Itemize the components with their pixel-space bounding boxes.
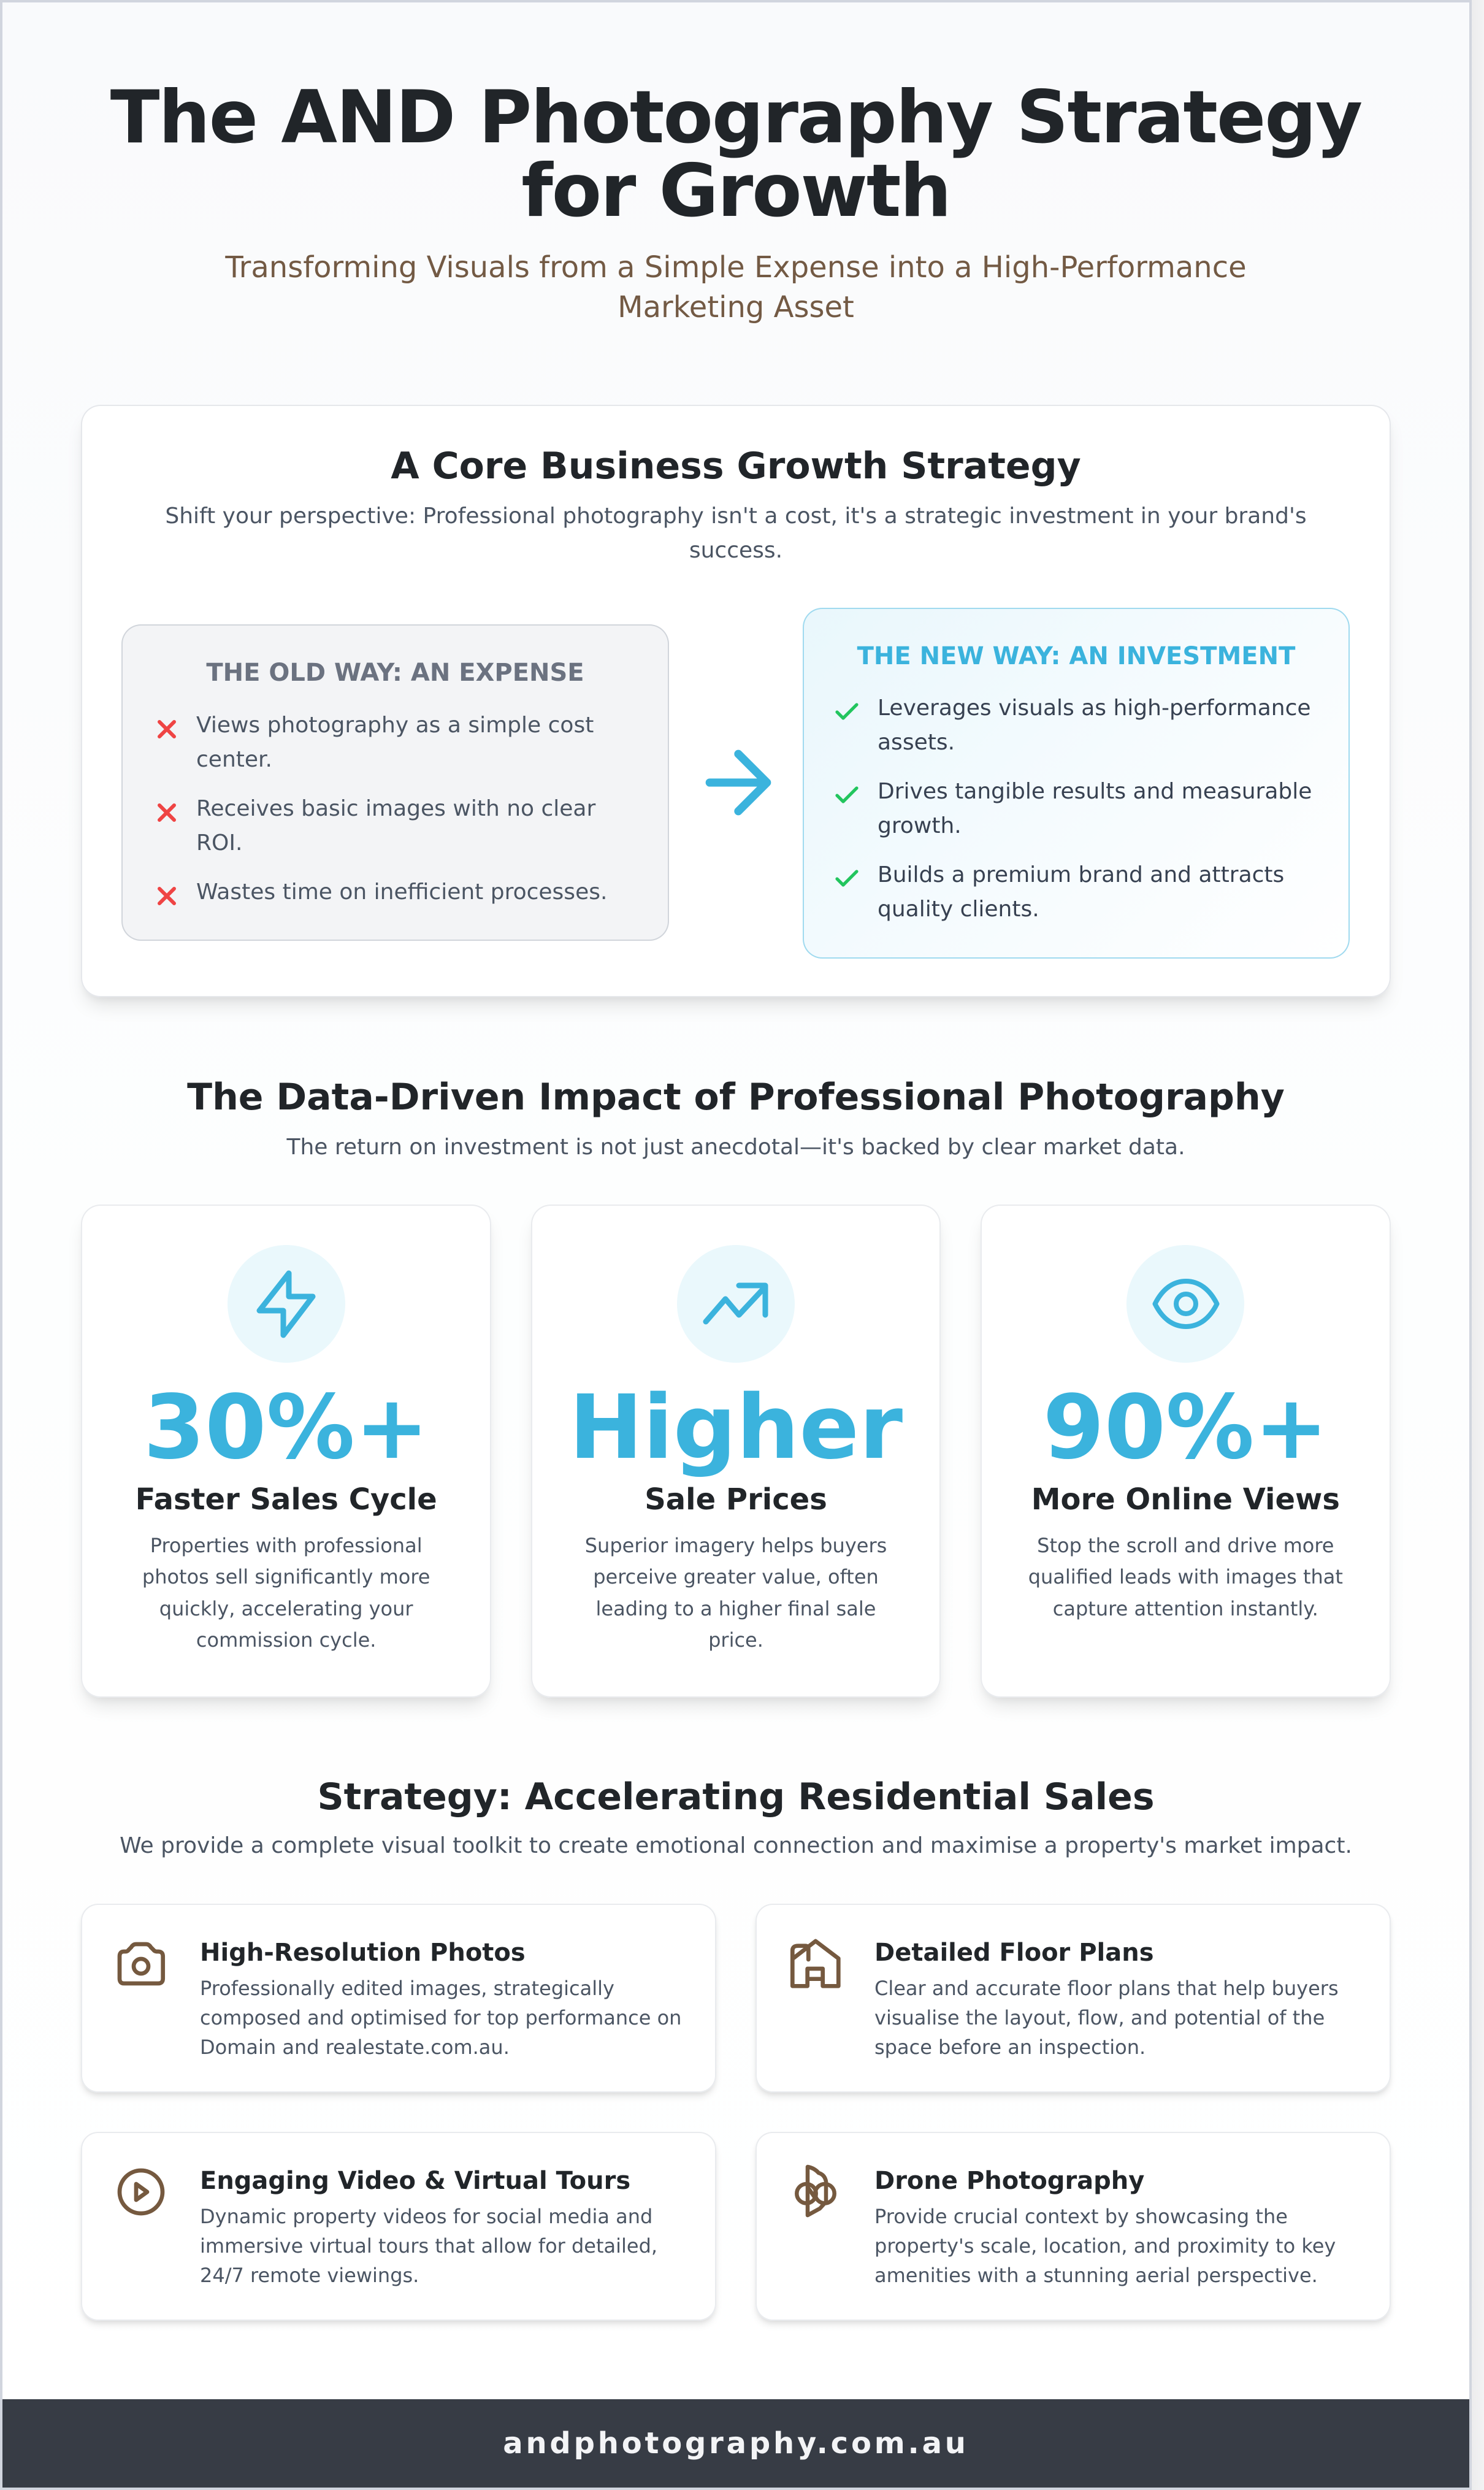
panel: stat higher sale prices xyxy=(531,1205,941,1698)
service description: Dynamic property videos for social media and xyxy=(200,2204,652,2228)
service description: composed and optimised for top performance on xyxy=(200,2005,681,2029)
stat description: qualified leads with images that xyxy=(1028,1565,1343,1588)
icon: house floor plan xyxy=(790,1939,841,1988)
service title: Drone Photography xyxy=(874,2166,1144,2194)
stat description: price. xyxy=(708,1628,763,1652)
service description: property's scale, location, and proximity to key xyxy=(874,2234,1336,2257)
service description xyxy=(200,1976,681,2058)
service description xyxy=(874,2204,1336,2286)
stat label: Sale Prices xyxy=(644,1482,827,1517)
panel: stat more online views xyxy=(981,1205,1391,1698)
service title: High-Resolution Photos xyxy=(200,1939,526,1967)
list item 2 xyxy=(878,779,1312,838)
subtitle: Marketing Asset xyxy=(618,289,854,324)
stat description: quickly, accelerating your xyxy=(159,1597,413,1620)
text: core strategy intro xyxy=(165,504,1307,563)
title xyxy=(110,75,1361,233)
service description: immersive virtual tours that allow for detailed, xyxy=(200,2234,657,2257)
stat description xyxy=(1028,1533,1343,1620)
stat description: Stop the scroll and drive more xyxy=(1037,1533,1334,1557)
stat description xyxy=(585,1533,887,1652)
service description: Professionally edited images, strategically xyxy=(200,1976,614,1999)
service title: Detailed Floor Plans xyxy=(874,1939,1154,1967)
list item 2: Receives basic images with no clear xyxy=(196,796,595,821)
text: core strategy intro: success. xyxy=(689,538,782,563)
list item 1: center. xyxy=(196,747,272,772)
stat description: photos sell significantly more xyxy=(142,1565,430,1588)
icon: cross 2 xyxy=(158,803,176,822)
service title: Engaging Video & Virtual Tours xyxy=(200,2166,630,2194)
stat number: 30%+ xyxy=(143,1376,429,1479)
panel: detailed floor plans xyxy=(755,1904,1391,2093)
list item 3: Wastes time on inefficient processes. xyxy=(196,879,607,905)
icon: eye xyxy=(1126,1245,1244,1363)
list item 3: Builds a premium brand and attracts xyxy=(878,862,1284,887)
icon: cross 3 xyxy=(158,887,176,905)
list item 2 xyxy=(196,796,596,856)
heading: core strategy: A Core Business Growth Strategy xyxy=(391,445,1081,488)
icon: play circle xyxy=(118,2169,164,2215)
heading: old way: THE OLD WAY: AN EXPENSE xyxy=(206,659,584,687)
stat description: Superior imagery helps buyers xyxy=(585,1533,887,1557)
list item 3: quality clients. xyxy=(878,897,1039,922)
panel: core business growth strategy xyxy=(81,405,1391,997)
stat description: commission cycle. xyxy=(196,1628,376,1652)
list item 2: growth. xyxy=(878,813,962,838)
service description: Clear and accurate floor plans that help buyers xyxy=(874,1976,1339,1999)
footer: andphotography.com.au xyxy=(503,2426,969,2461)
stat number: Higher xyxy=(569,1376,903,1479)
icon: check 2 xyxy=(835,786,859,803)
icon: trending up xyxy=(677,1245,795,1363)
list item 1: assets. xyxy=(878,730,955,755)
service description: Provide crucial context by showcasing the xyxy=(874,2204,1288,2228)
text: core strategy intro: Shift your perspective: Professional photography isn't a cost, it's a strategic investment in your brand's xyxy=(165,504,1307,529)
panel: the old way xyxy=(121,624,669,941)
heading: new way: THE NEW WAY: AN INVESTMENT xyxy=(857,642,1295,670)
list item 1: Leverages visuals as high-performance xyxy=(878,695,1311,721)
subtitle xyxy=(225,250,1247,324)
icon: check 3 xyxy=(835,870,859,887)
icon: drone xyxy=(795,2165,836,2218)
panel: stat faster sales cycle xyxy=(81,1205,491,1698)
service description: visualise the layout, flow, and potential of the xyxy=(874,2005,1325,2029)
list item 1: Views photography as a simple cost xyxy=(196,713,594,738)
stat label: Faster Sales Cycle xyxy=(136,1482,437,1517)
icon: camera xyxy=(118,1942,166,1986)
heading: accelerating residential sales: Strategy: Accelerating Residential Sales xyxy=(317,1776,1155,1818)
subtitle: Transforming Visuals from a Simple Expense into a High-Performance xyxy=(225,250,1247,285)
panel: engaging video and virtual tours xyxy=(81,2132,716,2321)
stat number: 90%+ xyxy=(1043,1376,1328,1479)
text: residential intro: We provide a complete visual toolkit to create emotional connection and maximise a property's market impact. xyxy=(120,1833,1352,1858)
service description: space before an inspection. xyxy=(874,2035,1146,2058)
stat description: capture attention instantly. xyxy=(1053,1597,1318,1620)
service description: 24/7 remote viewings. xyxy=(200,2263,419,2286)
stat label: More Online Views xyxy=(1031,1482,1340,1517)
service description: Domain and realestate.com.au. xyxy=(200,2035,510,2058)
text: data-driven intro: The return on investment is not just anecdotal—it's backed by clear market data. xyxy=(286,1135,1185,1160)
stat description: perceive greater value, often xyxy=(593,1565,879,1588)
service description xyxy=(200,2204,657,2286)
service description xyxy=(874,1976,1339,2058)
list item 1 xyxy=(878,695,1311,755)
title: The AND Photography Strategy xyxy=(110,75,1361,159)
service description: amenities with a stunning aerial perspective. xyxy=(874,2263,1318,2286)
icon: check 1 xyxy=(835,703,859,720)
list item 2: ROI. xyxy=(196,830,242,856)
panel: drone photography xyxy=(755,2132,1391,2321)
arrow xyxy=(705,749,771,816)
panel: the new way xyxy=(803,608,1350,959)
list item 3 xyxy=(878,862,1284,922)
stat description: Properties with professional xyxy=(150,1533,423,1557)
list item 2: Drives tangible results and measurable xyxy=(878,779,1312,804)
panel: high-resolution photos xyxy=(81,1904,716,2093)
icon: cross 1 xyxy=(158,720,176,738)
list item 1 xyxy=(196,713,594,772)
stat description xyxy=(142,1533,430,1652)
stat description: leading to a higher final sale xyxy=(596,1597,876,1620)
footer xyxy=(2,2399,1469,2488)
heading: data-driven impact: The Data-Driven Impact of Professional Photography xyxy=(187,1076,1285,1119)
title: for Growth xyxy=(521,148,950,233)
icon: lightning bolt xyxy=(228,1245,345,1363)
